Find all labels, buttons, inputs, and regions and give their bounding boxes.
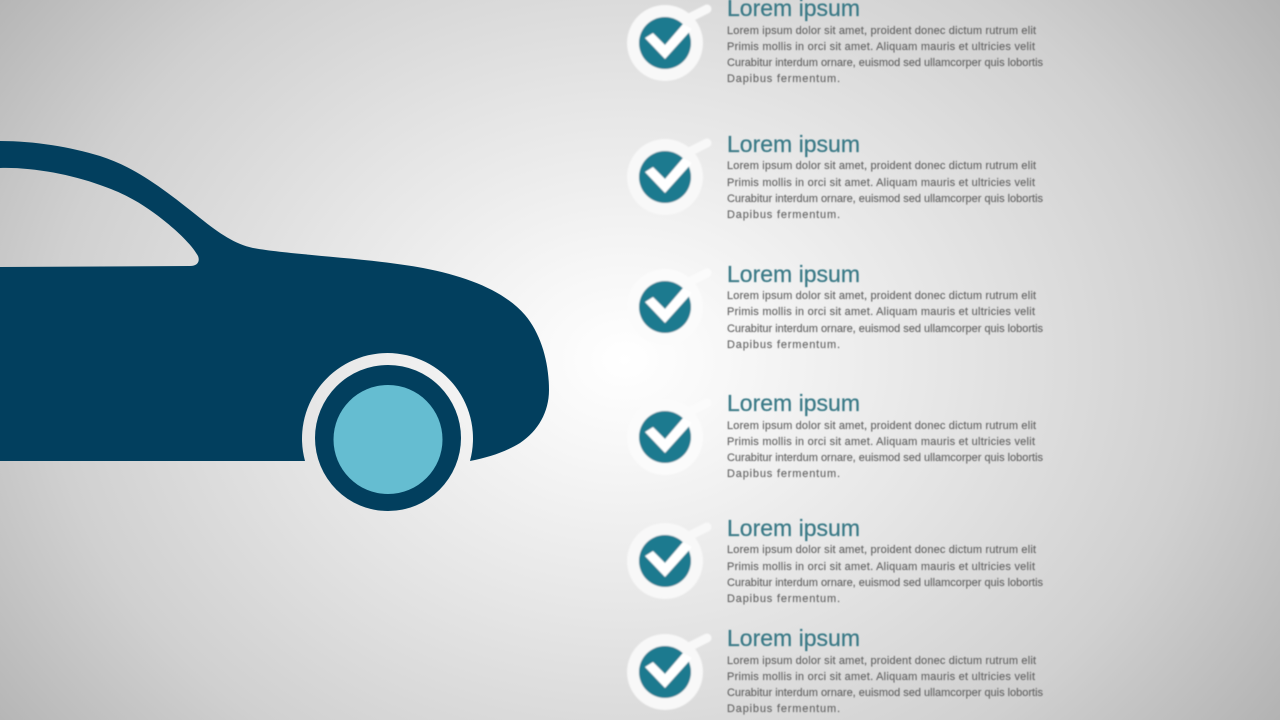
item 5 text: Dapibus fermentum.	[727, 593, 840, 605]
item 3 text: Primis mollis in orci sit amet. Aliquam mauris et ultricies velit	[727, 306, 1035, 318]
item 2 text: Dapibus fermentum.	[727, 209, 840, 221]
item 4 text: Primis mollis in orci sit amet. Aliquam mauris et ultricies velit	[727, 436, 1035, 448]
item 6 icon: check badge	[627, 634, 707, 710]
item 1 text	[727, 0, 1044, 85]
item 5 text: Lorem ipsum	[727, 515, 860, 541]
car body	[0, 141, 549, 461]
tyre	[315, 365, 461, 511]
hub	[334, 385, 442, 494]
item 5 text: Curabitur interdum ornare, euismod sed ullamcorper quis lobortis	[727, 577, 1044, 589]
item 6 text: Curabitur interdum ornare, euismod sed ullamcorper quis lobortis	[727, 687, 1044, 699]
item 6 text	[727, 625, 1044, 715]
item 2 text: Lorem ipsum dolor sit amet, proident donec dictum rutrum elit	[727, 160, 1036, 172]
item 4 text	[727, 390, 1044, 480]
item 2 icon: check badge	[627, 139, 707, 215]
item 3 text	[727, 261, 1044, 351]
item 6 text: Primis mollis in orci sit amet. Aliquam mauris et ultricies velit	[727, 671, 1035, 683]
item 3 text: Lorem ipsum dolor sit amet, proident donec dictum rutrum elit	[727, 290, 1036, 302]
item 1 text: Dapibus fermentum.	[727, 73, 840, 85]
item 3 text: Dapibus fermentum.	[727, 339, 840, 351]
item 6 text: Lorem ipsum	[727, 625, 860, 651]
item 6 text: Dapibus fermentum.	[727, 703, 840, 715]
item 6 text: Lorem ipsum dolor sit amet, proident donec dictum rutrum elit	[727, 655, 1036, 667]
item 1 icon: check badge	[627, 5, 707, 81]
item 3 text: Lorem ipsum	[727, 261, 860, 287]
item 4 text: Curabitur interdum ornare, euismod sed ullamcorper quis lobortis	[727, 452, 1044, 464]
item 5 text: Lorem ipsum dolor sit amet, proident donec dictum rutrum elit	[727, 544, 1036, 556]
item 2 text	[727, 131, 1044, 221]
item 2 text: Primis mollis in orci sit amet. Aliquam mauris et ultricies velit	[727, 177, 1035, 189]
item 5 icon: check badge	[627, 523, 707, 599]
item 3 icon: check badge	[627, 269, 707, 345]
item 4 text: Lorem ipsum dolor sit amet, proident donec dictum rutrum elit	[727, 420, 1036, 432]
item 2 text: Curabitur interdum ornare, euismod sed ullamcorper quis lobortis	[727, 193, 1044, 205]
item 1 text: Primis mollis in orci sit amet. Aliquam mauris et ultricies velit	[727, 41, 1035, 53]
item 4 icon: check badge	[627, 399, 707, 475]
item 5 text	[727, 515, 1044, 605]
item 4 text: Dapibus fermentum.	[727, 468, 840, 480]
car illustration	[0, 141, 549, 511]
item 1 text: Curabitur interdum ornare, euismod sed ullamcorper quis lobortis	[727, 57, 1044, 69]
item 3 text: Curabitur interdum ornare, euismod sed ullamcorper quis lobortis	[727, 323, 1044, 335]
item 1 text: Lorem ipsum dolor sit amet, proident donec dictum rutrum elit	[727, 25, 1036, 37]
item 5 text: Primis mollis in orci sit amet. Aliquam mauris et ultricies velit	[727, 561, 1035, 573]
item 4 text: Lorem ipsum	[727, 390, 860, 416]
item 2 text: Lorem ipsum	[727, 131, 860, 157]
